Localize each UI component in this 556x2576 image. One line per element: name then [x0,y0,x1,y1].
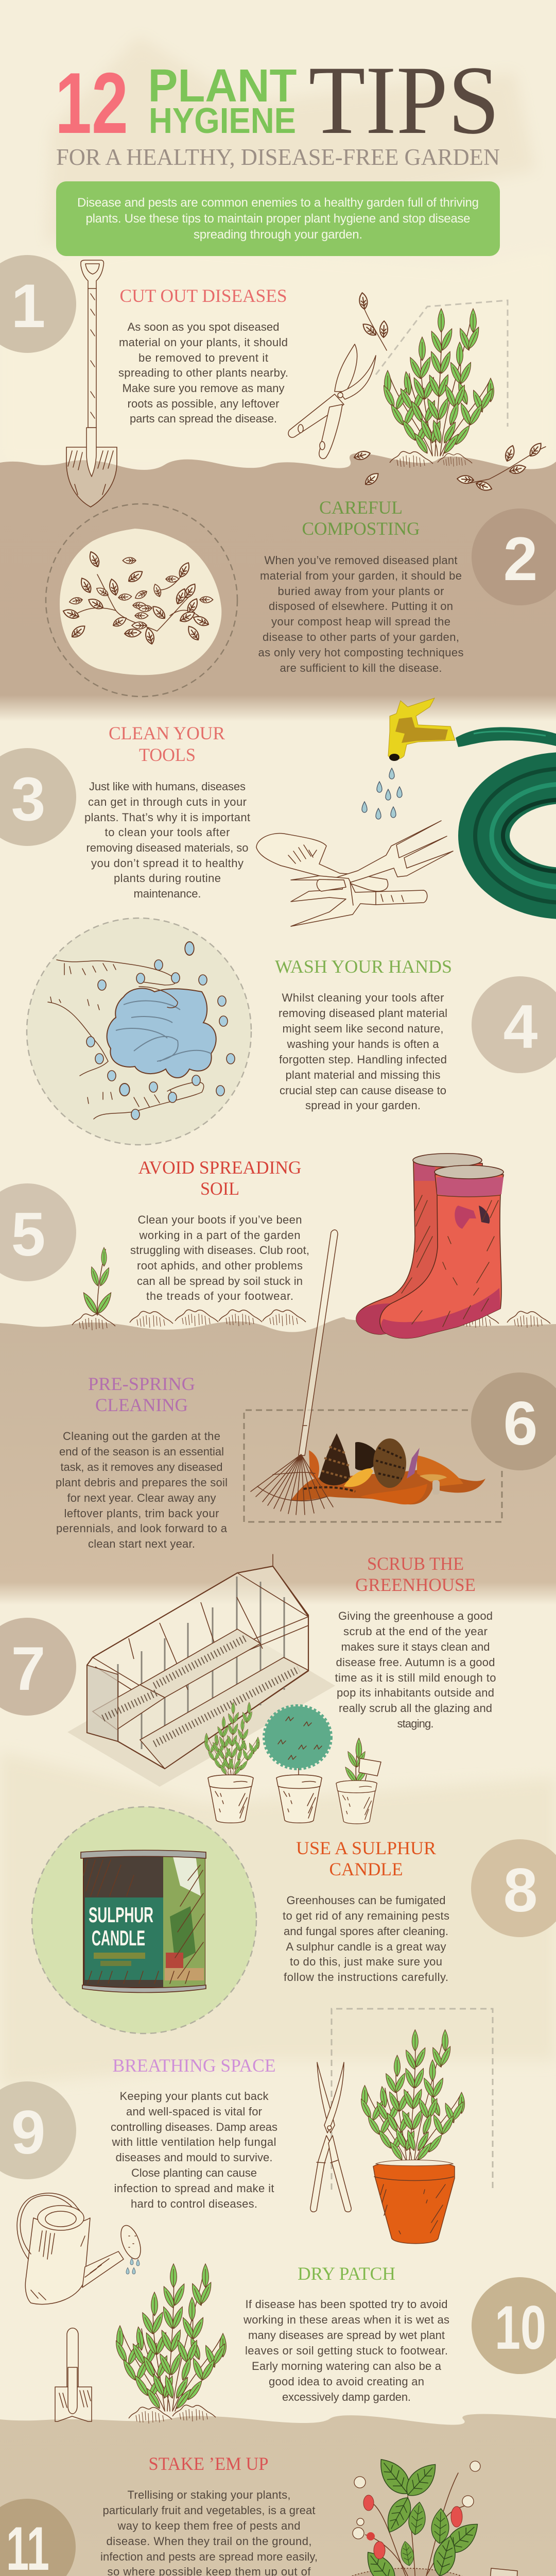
icon: seedling [81,1247,114,1316]
number badge 3 [0,748,76,846]
body text: washing your hands is often a [286,1038,439,1050]
icon: water drops [362,768,402,819]
body text: pop its inhabitants outside and [337,1686,494,1699]
title word TIPS: TIPS [309,46,499,155]
intro panel: plants. Use these tips to maintain proper plant hygiene and stop disease [85,212,471,226]
body text: follow the instructions carefully. [284,1971,448,1984]
number badge 11 [0,2499,76,2576]
panel: tip 6 pre-spring cleaning [56,1230,556,1550]
body text: material on your plants, it should [119,336,288,349]
soil band 2 [0,1317,556,1605]
tin label text: SULPHUR [89,1903,153,1927]
number badge 6 [471,1372,556,1470]
icon: potted plant [203,1702,260,1823]
body text: Greenhouses can be fumigated [286,1894,446,1907]
body text: spread in your garden. [305,1099,421,1112]
body text [118,320,288,425]
body text: disease free. Autumn is a good [336,1656,495,1669]
panel: tip 7 scrub the greenhouse [0,1553,496,1824]
icon: yellow tap [388,698,455,761]
soil band 3 [0,2414,556,2576]
body text: clean start next year. [88,1537,195,1550]
body text: particularly fruit and vegetables, is a great [103,2504,315,2517]
number badge 4 [472,976,556,1073]
body text: root aphids, and other problems [137,1259,303,1272]
body text: Whilst cleaning your tools after [282,991,444,1004]
number badge 8 [471,1839,556,1937]
number badge 7: 7 [11,1634,45,1703]
body text: excessively damp garden. [282,2391,411,2403]
icon: crossed hand fork and trowel [256,821,453,926]
body text: crucial step can cause disease to [280,1084,446,1097]
body text: plants during routine [114,872,221,885]
heading: CUT OUT DISEASES [119,285,287,306]
heading: TOOLS [139,744,196,765]
heading [302,497,420,539]
number badge 8: 8 [503,1856,537,1925]
number badge 3: 3 [11,765,45,834]
number badge 10 [472,2277,556,2374]
body text: spreading to other plants nearby. [118,366,288,379]
icon: sulphur candle tin [81,1850,206,1993]
body text: working in a part of the garden [139,1229,301,1242]
body text [258,554,463,674]
body text: forgotten step. Handling infected [279,1053,447,1066]
body text [100,2488,318,2576]
icon: potted seedling with label [336,1738,381,1824]
title number 12: 12 [55,55,128,151]
heading: SOIL [200,1178,239,1199]
number badge 4: 4 [503,992,538,1061]
panel: tip 10 dry patch [55,2263,556,2424]
intro panel [56,181,500,256]
body text: roots as possible, any leftover [128,397,279,410]
body text: with little ventilation help fungal [111,2136,276,2148]
body text: way to keep them free of pests and [117,2519,301,2532]
body text: parts can spread the disease. [130,412,277,425]
body text: for next year. Clear away any [67,1492,216,1504]
panel: tip 4 wash your hands [27,918,556,1145]
body text: scrub at the end of the year [343,1625,488,1638]
dashed frame [244,1410,502,1522]
background diamond [67,1631,335,1787]
tin label text: CANDLE [92,1926,145,1950]
number badge 6: 6 [503,1389,537,1458]
body text: A sulphur candle is a great way [286,1940,446,1953]
body text: struggling with diseases. Club root, [130,1244,309,1257]
body text [283,1894,449,1984]
body text: to do this, just make sure you [290,1955,442,1968]
body text: staging. [397,1717,433,1730]
body text: Giving the greenhouse a good [338,1609,493,1622]
body text: end of the season is an essential [59,1445,224,1458]
body text [111,2090,277,2210]
icon: soil mound [129,2405,216,2424]
body text: leftover plants, trim back your [64,1507,219,1520]
heading [138,1157,302,1199]
icon: soil mounds [72,1310,550,1330]
body text: as only very hot composting techniques [258,646,463,659]
dashed circle [46,504,237,697]
heading [88,1374,195,1415]
heading [296,1838,436,1879]
icon: strawberry plant [335,2453,517,2576]
body text: to clean your tools after [105,826,230,839]
panel: tip 3 clean your tools [0,698,556,926]
number badge 5: 5 [11,1200,45,1269]
body text: really scrub all the glazing and [339,1702,492,1715]
heading: CANDLE [329,1859,403,1879]
tin label text [89,1903,153,1950]
body text: buried away from your plants or [278,585,444,598]
panel: tip 9 breathing space [0,2009,493,2304]
icon: hose coil [456,727,556,903]
title word PLANT: PLANT [148,60,297,112]
body text: removing diseased materials, so [86,841,248,854]
intro panel: Disease and pests are common enemies to a healthy garden full of thriving [77,196,479,210]
body text: can all be spread by soil stuck in [137,1275,303,1287]
dashed circle [32,1807,256,2033]
icon: watering can [17,2193,145,2304]
body text: makes sure it stays clean and [341,1640,490,1653]
body text: be removed to prevent it [138,351,268,364]
heading: GREENHOUSE [355,1574,476,1595]
body text: and fungal spores after cleaning. [284,1925,448,1938]
icon: soil mound [390,451,472,468]
body text: many diseases are spread by wet plant [248,2329,445,2342]
body text: disease to other parts of your garden, [263,631,459,643]
panel: tip 2 careful composting [46,497,556,697]
icon: red wellington boots [356,1154,503,1338]
body text: As soon as you spot diseased [128,320,279,333]
dashed frame [332,2009,493,2190]
body text: your compost heap will spread the [271,615,450,628]
body text: are sufficient to kill the disease. [280,662,442,674]
body text: perennials, and look forward to a [56,1522,228,1535]
heading: CLEANING [95,1395,188,1415]
heading: CLEAN YOUR [109,723,225,743]
body text: maintenance. [134,887,201,900]
body text [56,1430,228,1550]
body text: material from your garden, it should be [260,569,462,582]
icon: soapy hands [48,942,235,1120]
body text: might seem like second nature, [282,1022,444,1035]
heading: STAKE ’EM UP [148,2453,269,2474]
icon: greenhouse [87,1554,308,1769]
body text: Trellising or staking your plants, [128,2488,290,2501]
panel: tip 11 stake em up [0,2453,530,2576]
body text [335,1609,496,1730]
body text: and well-spaced is vital for [126,2105,262,2118]
icon: plant [113,2264,228,2411]
number badge 9 [0,2081,76,2179]
heading: PRE-SPRING [88,1374,195,1394]
body text: you don’t spread it to healthy [91,857,244,870]
body text [279,991,447,1112]
number badge 2: 2 [503,524,537,594]
body text: Close planting can cause [131,2166,257,2179]
heading: COMPOSTING [302,518,420,539]
soil band 1 [0,453,556,721]
body text: Keeping your plants cut back [119,2090,269,2103]
icon: leaf and pine cone pile [291,1433,485,1504]
icon: scattered leaf clippings [62,550,213,645]
icon: potted topiary [265,1706,331,1823]
body text: disease. When they trail on the ground, [106,2535,312,2548]
body text: infection to spread and make it [114,2182,274,2195]
body text: hard to control diseases. [131,2197,257,2210]
subtitle: FOR A HEALTHY, DISEASE-FREE GARDEN [56,144,500,170]
number badge 2 [472,509,556,605]
body text: plant material and missing this [285,1069,441,1081]
icon: fallen leaves [353,441,546,493]
icon: planted trowel [55,2328,92,2421]
panel: tip 5 avoid spreading soil [0,1154,550,1338]
heading [109,723,225,765]
heading: USE A SULPHUR [296,1838,436,1858]
body text: disposed of elsewhere. Putting it on [269,600,453,613]
number badge 1 [0,255,76,353]
body text: leaves or soil getting stuck to footwear. [245,2344,448,2357]
panel: tip 8 sulphur candle [32,1807,556,2033]
title word HYGIENE: HYGIENE [149,100,296,141]
body text: plant debris and prepares the soil [56,1476,228,1489]
body text: good idea to avoid creating an [269,2375,424,2388]
icon: plant [381,309,495,456]
icon: falling cut stem [358,292,388,350]
icon: spade [66,260,117,507]
body text: controlling diseases. Damp areas [111,2121,277,2133]
number badge 1: 1 [11,272,45,341]
body text: diseases and mould to survive. [115,2151,273,2164]
number badge 5 [0,1183,76,1281]
body text: task, as it removes any diseased [61,1461,222,1473]
heading: SCRUB THE [367,1553,464,1574]
icon: rake [251,1230,338,1515]
body text: infection and pests are spread more easily, [100,2550,318,2563]
heading: WASH YOUR HANDS [275,956,452,977]
heading: BREATHING SPACE [112,2055,276,2076]
body text: the treads of your footwear. [146,1290,293,1302]
icon: garden shears [310,2062,351,2212]
body text: Early morning watering can also be a [252,2360,442,2372]
body text: Make sure you remove as many [123,382,284,395]
body text: When you’ve removed diseased plant [265,554,457,567]
icon: secateurs [288,344,376,459]
body text: plants. That’s why it is important [84,811,250,824]
body text: Just like with humans, diseases [89,780,246,793]
number badge 9: 9 [11,2098,45,2167]
body text [130,1213,309,1302]
heading: AVOID SPREADING [138,1157,302,1178]
cream blob [60,529,221,675]
body text: can get in through cuts in your [88,795,247,808]
body text [243,2298,449,2403]
heading: DRY PATCH [298,2263,395,2284]
heading [355,1553,476,1595]
intro panel: spreading through your garden. [194,228,362,242]
dashed frame [376,300,508,427]
body text: Clean your boots if you’ve been [138,1213,302,1226]
body text: If disease has been spotted try to avoid [245,2298,448,2311]
body text: working in these areas when it is wet as [243,2313,449,2326]
dashed circle [27,918,251,1145]
icon: plant in terracotta pot [358,2030,466,2244]
title [55,46,500,170]
body text [84,780,250,900]
body text: time as it is still mild enough to [335,1671,496,1684]
panel: tip 1 cut out diseases [0,255,546,507]
heading: CAREFUL [319,497,403,518]
number badge 7 [0,1618,76,1716]
body text: removing diseased plant material [279,1007,447,1020]
body text: to get rid of any remaining pests [283,1909,449,1922]
body text: Cleaning out the garden at the [63,1430,220,1443]
